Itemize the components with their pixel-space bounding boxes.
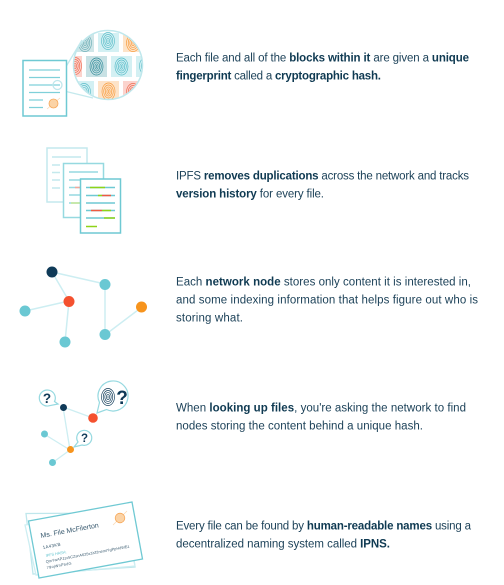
middle document [64, 164, 104, 218]
front card: QmYwAPJzv5CZsnA625s3Xf2nemtYgPpHdWEz [45, 545, 130, 564]
front card [28, 502, 142, 578]
network diagram [20, 266, 147, 348]
text: fingerprint: Each file and all of the blocks within it are given a unique [176, 52, 469, 64]
speech bubble: small question: ? [81, 433, 88, 445]
text: duplications: IPFS removes duplications across the network and tracks [176, 170, 469, 182]
front card: 79ojWnPbdG [47, 562, 72, 570]
text: fingerprint called a cryptographic hash. [176, 70, 381, 82]
text: decentralized naming system called IPNS. [176, 538, 390, 550]
text: looking up files: When looking up files, you're asking the network to find [176, 402, 466, 414]
magnifier circle with fingerprint tiles [72, 30, 144, 100]
text: storing what. [176, 312, 243, 324]
text: nodes storing the content behind a unique hash. [176, 420, 423, 432]
front card: IPFS HASH: [45, 549, 67, 558]
text: and some indexing information that helps figure out who is [176, 294, 478, 306]
back document [47, 148, 87, 202]
front card: Ms. File McFilerton [40, 522, 99, 540]
speech bubble: question: ? [43, 391, 51, 406]
document [23, 60, 66, 116]
text: version history for every file. [176, 188, 324, 200]
speech bubble: fingerprint query: ? [116, 388, 128, 409]
lookup diagram [39, 381, 128, 466]
icon: name cards [25, 502, 142, 578]
front document [80, 179, 120, 233]
text: human-readable names: Every file can be found by human-readable names using a [176, 520, 472, 532]
text: network node: Each network node stores only content it is interested in, [176, 276, 471, 288]
icon: stacked document versions [47, 148, 120, 233]
icon: file with magnified fingerprints [23, 30, 157, 116]
front card: 1A43KB [42, 542, 61, 550]
